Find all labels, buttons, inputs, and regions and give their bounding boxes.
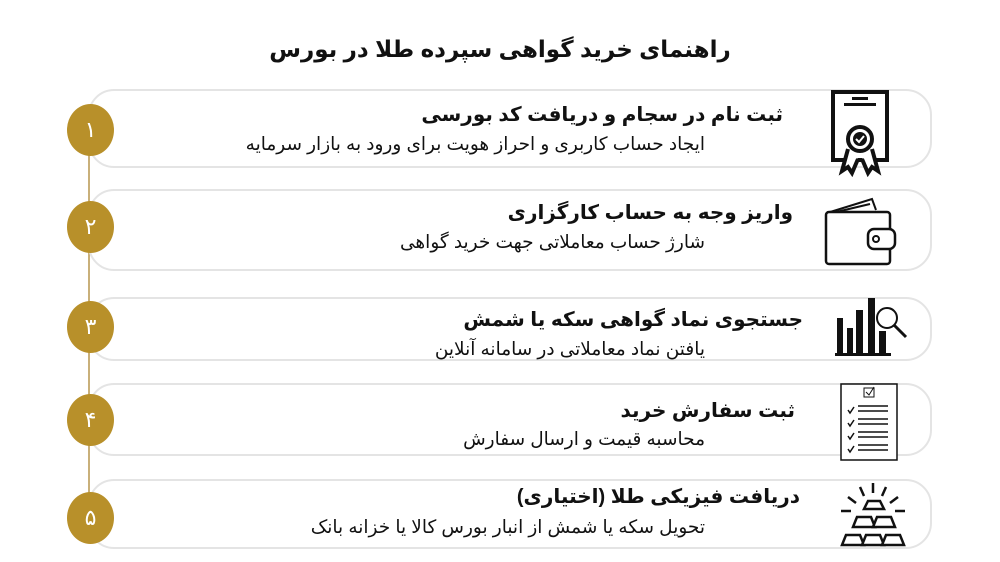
heading 3: جستجوی نماد گواهی سکه یا شمش xyxy=(463,309,803,331)
circle 1 xyxy=(67,104,114,156)
heading 1: ثبت نام در سجام و دریافت کد بورسی xyxy=(421,104,783,126)
sub 5: تحویل سکه یا شمش از انبار بورس کالا یا خزانه بانک xyxy=(311,516,705,537)
heading 4: ثبت سفارش خرید xyxy=(620,400,795,422)
heading 2: واریز وجه به حساب کارگزاری xyxy=(508,202,793,224)
title: راهنمای خرید گواهی سپرده طلا در بورس xyxy=(269,36,731,62)
heading 5: دریافت فیزیکی طلا (اختیاری) xyxy=(517,486,800,508)
sub 4: محاسبه قیمت و ارسال سفارش xyxy=(463,428,705,449)
icon: checklist xyxy=(840,383,898,461)
circle 3 xyxy=(67,301,114,353)
icon: chart search xyxy=(835,298,907,356)
circle 5: ۵ xyxy=(85,505,96,530)
panel: step 2 xyxy=(88,189,932,271)
sub 3: یافتن نماد معاملاتی در سامانه آنلاین xyxy=(435,338,705,359)
icon: wallet xyxy=(824,198,896,266)
icon: gold bars xyxy=(840,483,906,546)
panel: step 5 xyxy=(88,479,932,549)
circle 4: ۴ xyxy=(85,407,96,432)
circle 5 xyxy=(67,492,114,544)
panel: step 1 xyxy=(88,89,932,168)
circle 3: ۳ xyxy=(85,314,96,339)
panel: step 3 xyxy=(88,297,932,361)
panel: step 4 xyxy=(88,383,932,456)
sub 1: ایجاد حساب کاربری و احراز هویت برای ورود به بازار سرمایه xyxy=(246,133,705,154)
circle 1: ۱ xyxy=(85,117,96,142)
icon: certificate xyxy=(831,90,889,177)
sub 2: شارژ حساب معاملاتی جهت خرید گواهی xyxy=(400,231,705,252)
timeline line xyxy=(88,130,90,518)
circle 4 xyxy=(67,394,114,446)
circle 2: ۲ xyxy=(85,214,96,239)
circle 2 xyxy=(67,201,114,253)
